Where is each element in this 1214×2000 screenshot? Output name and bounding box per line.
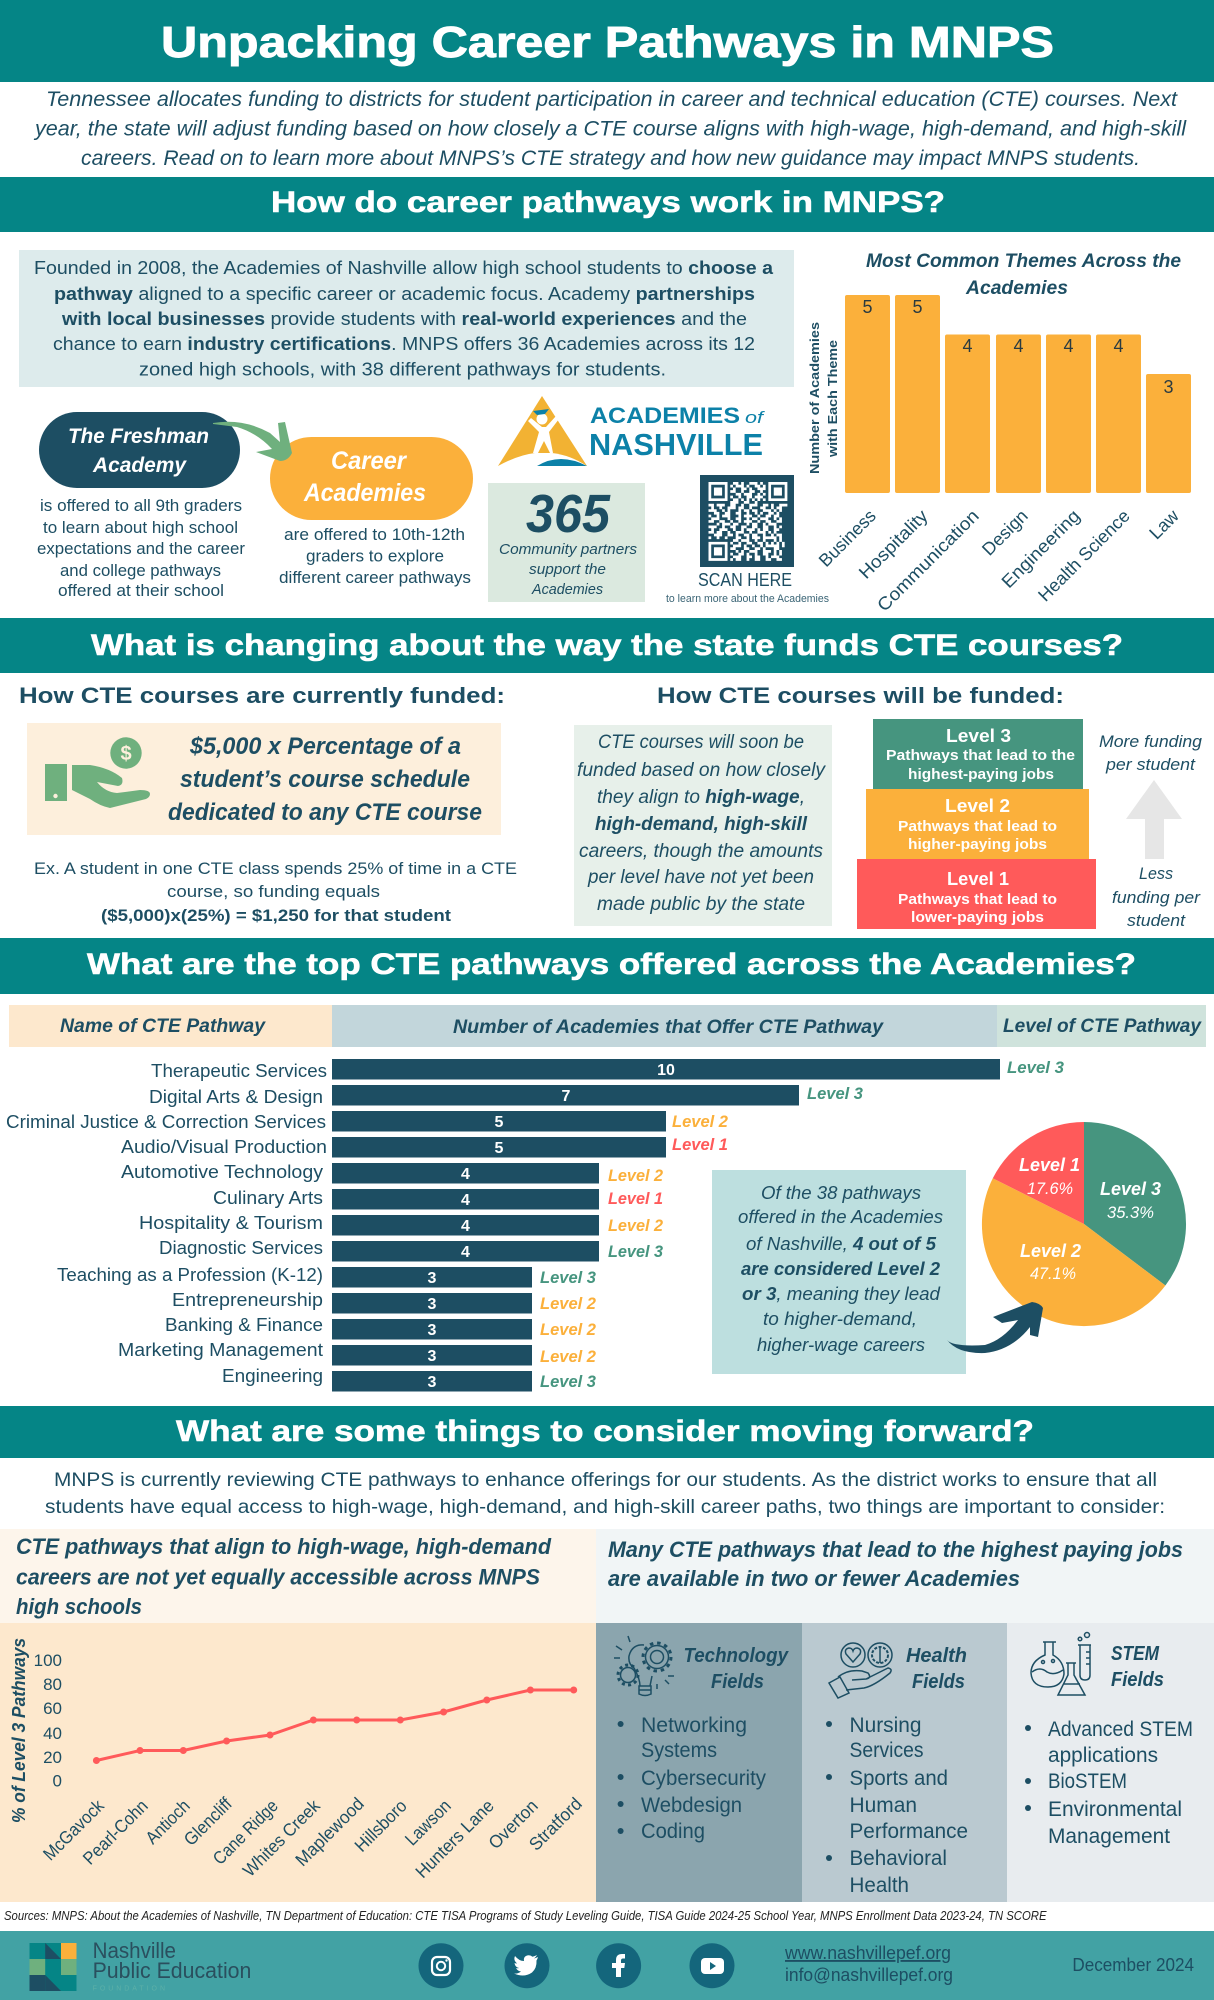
list: health pathways: Nursing	[850, 1714, 922, 1737]
row: Marketing Management	[118, 1340, 596, 1366]
chart: most common themes: 5	[912, 297, 923, 317]
chart: most common themes: Engineering	[998, 506, 1084, 592]
level 3 block: Level 3	[946, 726, 1011, 746]
panel: future funding description: CTE courses will soon be	[598, 732, 804, 753]
logo: Nashville Public Education Foundation: Nashville	[93, 1938, 176, 1963]
panel: academies description: chance to earn industry certifications . MNPS offers 36 Academies across its 12	[53, 333, 755, 354]
level pyramid	[857, 719, 1096, 929]
icon: hand holding money: $	[120, 743, 132, 765]
pie chart: pathway levels	[982, 1122, 1186, 1326]
icon: youtube	[690, 1943, 734, 1988]
list: technology pathways: Cybersecurity	[641, 1767, 766, 1790]
list: technology pathways	[618, 1714, 766, 1843]
QR code with scan label: to learn more about the Academies	[666, 593, 829, 605]
row: Hospitality and Tourism	[139, 1213, 663, 1236]
level 3 block: highest-paying jobs	[908, 767, 1054, 783]
list: technology pathways: Webdesign	[641, 1794, 742, 1817]
line chart: percent of level 3 pathways: Pearl-Cohn	[79, 1796, 152, 1869]
row: Banking and Finance: Level 2	[540, 1321, 596, 1339]
row: Entrepreneurship: Entrepreneurship	[172, 1290, 323, 1310]
row: Teaching as a Profession	[57, 1265, 596, 1288]
row: Criminal Justice: Level 2	[672, 1113, 728, 1131]
list: health pathways: Behavioral	[850, 1847, 947, 1870]
chart: most common themes: Communication	[873, 506, 983, 615]
list: STEM pathways: Environmental	[1048, 1798, 1182, 1821]
row: Digital Arts and Design	[149, 1085, 863, 1107]
row: Entrepreneurship	[172, 1290, 596, 1314]
level 3 block	[873, 719, 1083, 789]
callout: 4 out of 5 pathways	[712, 1170, 966, 1374]
icon: hand holding money	[45, 737, 150, 808]
row: Engineering: Level 3	[540, 1373, 596, 1391]
list: STEM pathways: Advanced STEM	[1048, 1718, 1193, 1741]
row: Audio Visual Production: Level 1	[672, 1136, 728, 1154]
list: health pathways: Performance	[850, 1820, 968, 1843]
row: Hospitality and Tourism: 4	[461, 1218, 470, 1235]
chart: most common themes: Hospitality	[855, 506, 932, 583]
panel: academies description: Founded in 2008, the Academies of Nashville allow high school students to choose a	[34, 257, 774, 278]
pie chart: pathway levels: 17.6%	[1027, 1180, 1073, 1198]
panel: current funding formula: dedicated to any CTE course	[168, 799, 482, 826]
panel: academies description: pathway aligned to a specific career or academic focus. Academy partnerships	[54, 283, 755, 304]
bar chart: pathways by academies	[6, 1059, 1064, 1392]
panel: academies description	[19, 250, 794, 387]
table header row	[9, 1005, 1206, 1047]
level 2 block: Pathways that lead to	[898, 819, 1057, 835]
chart: most common themes: with Each Theme	[826, 340, 840, 458]
panel: future funding description	[574, 725, 832, 926]
panel: technology fields	[596, 1623, 802, 1902]
row: Marketing Management: 3	[428, 1348, 437, 1365]
chart: most common themes: 4	[1063, 336, 1074, 356]
panel: current funding formula: $5,000 x Percentage of a	[189, 733, 461, 760]
callout: 4 out of 5 pathways: of Nashville, 4 out of 5	[746, 1234, 937, 1254]
row: Engineering: Engineering	[222, 1366, 323, 1386]
row: Banking and Finance: 3	[428, 1322, 437, 1339]
level 1 block: Level 1	[947, 869, 1009, 889]
list: STEM pathways: BioSTEM	[1048, 1770, 1127, 1793]
chart: most common themes: Number of Academies	[808, 322, 822, 474]
pie chart: pathway levels: Level 3	[1100, 1179, 1161, 1199]
chart: most common themes: 5	[862, 297, 873, 317]
chart: most common themes: Academies	[965, 277, 1068, 299]
text: funding example: ($5,000)x(25%) = $1,250 for that student	[101, 906, 451, 925]
table header row: Number of Academies that Offer CTE Pathway	[453, 1017, 884, 1038]
chart: most common themes: 4	[962, 336, 973, 356]
panel: future funding description: careers, though the amounts	[579, 841, 823, 862]
arrow: freshman to career	[213, 422, 292, 461]
panel: freshman academy: offered at their school	[58, 582, 224, 600]
line chart: percent of level 3 pathways: McGavock	[39, 1795, 108, 1864]
row: Audio Visual Production	[121, 1136, 728, 1158]
panel: fields heading	[596, 1529, 1214, 1623]
row: Criminal Justice	[6, 1111, 728, 1132]
logo: Nashville Public Education Foundation	[30, 1938, 251, 1992]
panel: future funding description: high-demand, high-skill	[595, 814, 808, 835]
row: Culinary Arts: Level 1	[608, 1190, 663, 1208]
panel: freshman academy: and college pathways	[60, 562, 221, 580]
panel: career academies: Academies	[303, 479, 426, 507]
line chart: percent of level 3 pathways: Overton	[485, 1796, 542, 1853]
line chart: percent of level 3 pathways: 80	[43, 1675, 62, 1694]
level 2 block: Level 2	[945, 796, 1010, 816]
section heading: top pathways: What are the top CTE pathways offered across the Academies?	[87, 948, 1136, 981]
row: Culinary Arts: 4	[461, 1192, 470, 1209]
panel: current funding formula	[27, 723, 501, 835]
chart: most common themes: Design	[978, 506, 1032, 559]
section heading: funding change	[0, 618, 1214, 673]
list: technology pathways: Systems	[641, 1739, 717, 1762]
footer	[0, 1931, 1214, 2000]
panel: 365 community partners: 365	[526, 484, 611, 544]
panel: career academies: graders to explore	[306, 548, 444, 566]
panel: fields heading: are available in two or fewer Academies	[608, 1566, 1020, 1591]
icon: hand with heart and brain	[829, 1643, 892, 1698]
chart: most common themes: Business	[815, 506, 880, 571]
panel: 365 community partners: Academies	[531, 581, 603, 598]
line chart: percent of level 3 pathways: % of Level 3 Pathways	[9, 1638, 29, 1823]
list: technology pathways: Coding	[641, 1820, 705, 1843]
pie chart: pathway levels: 35.3%	[1107, 1204, 1154, 1222]
panel: freshman academy: Academy	[92, 453, 187, 477]
panel: access heading: CTE pathways that align to high-wage, high-demand	[16, 1534, 552, 1559]
row: Therapeutic Services: Level 3	[1007, 1059, 1064, 1077]
text: funding example: course, so funding equals	[167, 882, 380, 901]
panel: 365 community partners	[488, 483, 645, 602]
row: Engineering	[222, 1366, 596, 1392]
title banner	[0, 0, 1214, 82]
callout: 4 out of 5 pathways: offered in the Academies	[738, 1207, 943, 1227]
funding direction arrow and labels: Less	[1139, 864, 1173, 883]
contact links: info@nashvillepef.org	[785, 1964, 953, 1985]
line chart: percent of level 3 pathways: 0	[53, 1772, 62, 1790]
panel: academies description: with local businesses provide students with real-world experiences and the	[61, 308, 747, 329]
callout: 4 out of 5 pathways: are considered Level 2	[741, 1259, 940, 1279]
row: Automotive Technology: Level 2	[608, 1167, 663, 1185]
row: Digital Arts and Design: Digital Arts & Design	[149, 1087, 323, 1107]
panel: freshman academy: The Freshman	[68, 424, 209, 448]
section heading: moving forward: What are some things to consider moving forward?	[176, 1415, 1034, 1448]
panel: career academies: Career	[331, 447, 407, 475]
icon: lightbulb with gears	[614, 1636, 674, 1696]
line chart: percent of level 3 pathways: 20	[43, 1748, 62, 1767]
panel: access heading: high schools	[16, 1594, 142, 1619]
logo: Academies of Nashville: of	[745, 408, 766, 427]
panel: technology fields: Technology	[684, 1645, 789, 1667]
panel: freshman academy	[37, 412, 246, 600]
panel: STEM fields	[1007, 1623, 1214, 1902]
list: health pathways	[826, 1714, 968, 1897]
level 2 block: higher-paying jobs	[908, 837, 1047, 853]
text: funding example	[34, 859, 517, 925]
icon: facebook	[596, 1943, 641, 1988]
table header row: Level of CTE Pathway	[1003, 1016, 1202, 1037]
table header row: Name of CTE Pathway	[60, 1016, 266, 1037]
funding direction arrow and labels: student	[1127, 911, 1186, 930]
panel: future funding description: they align to high-wage,	[597, 787, 805, 808]
panel: health fields	[802, 1623, 1007, 1902]
panel: health fields: Health	[906, 1645, 967, 1667]
section heading: how pathways work	[0, 177, 1214, 232]
chart: most common themes: Health Science	[1034, 506, 1134, 605]
row: Marketing Management: Level 2	[540, 1348, 596, 1366]
panel: future funding description: made public by the state	[597, 894, 805, 915]
line chart: percent of level 3 pathways: Cane Ridge	[209, 1796, 282, 1869]
panel: future funding description: per level have not yet been	[587, 867, 814, 888]
logo: Nashville Public Education Foundation: FOUNDATION	[93, 1986, 165, 1992]
logo: Academies of Nashville	[498, 396, 766, 468]
contact links: www.nashvillepef.org	[784, 1942, 951, 1963]
row: Hospitality and Tourism: Hospitality & Tourism	[139, 1213, 323, 1233]
level 1 block: Pathways that lead to	[898, 892, 1057, 908]
line chart: percent of level 3 pathways: 40	[43, 1724, 62, 1743]
list: STEM pathways: Management	[1048, 1825, 1170, 1848]
intro text: considerations: students have equal access to high-wage, high-demand, and high-skill career paths, two things are important to consider:	[45, 1496, 1165, 1518]
panel: 365 community partners: support the	[529, 561, 606, 578]
intro paragraph: careers. Read on to learn more about MNPS’s CTE strategy and how new guidance may impact MNPS students.	[81, 147, 1140, 170]
row: Digital Arts and Design: 7	[562, 1088, 571, 1105]
pie chart: pathway levels: Level 1	[1019, 1155, 1080, 1175]
row: Therapeutic Services	[151, 1059, 1064, 1081]
panel: access heading	[0, 1529, 596, 1623]
row: Audio Visual Production: 5	[495, 1140, 504, 1157]
list: STEM pathways	[1025, 1718, 1193, 1848]
chart: most common themes: 4	[1113, 336, 1124, 356]
panel: future funding description: funded based on how closely	[577, 760, 827, 781]
row: Audio Visual Production: Audio/Visual Production	[121, 1137, 327, 1157]
list: health pathways: Health	[850, 1874, 909, 1897]
panel: career academies	[270, 437, 473, 587]
panel: health fields: Fields	[912, 1671, 965, 1693]
panel: technology fields: Fields	[711, 1671, 764, 1693]
callout: 4 out of 5 pathways: Of the 38 pathways	[761, 1183, 921, 1203]
line chart: percent of level 3 pathways: Lawson	[401, 1796, 455, 1849]
row: Therapeutic Services: 10	[657, 1062, 675, 1079]
level 1 block	[857, 859, 1096, 929]
row: Engineering: 3	[428, 1374, 437, 1391]
level 2 block	[866, 789, 1089, 859]
chart: most common themes: Most Common Themes Across the	[866, 250, 1181, 272]
row: Culinary Arts: Culinary Arts	[213, 1188, 323, 1208]
intro text: considerations	[45, 1469, 1165, 1518]
panel: STEM fields: STEM	[1111, 1643, 1160, 1665]
row: Teaching as a Profession: 3	[428, 1270, 437, 1287]
row: Banking and Finance	[165, 1315, 596, 1340]
list: health pathways: Human	[850, 1794, 917, 1817]
funding direction arrow and labels: funding per	[1112, 888, 1201, 907]
sources line: Sources: MNPS: About the Academies of Nashville, TN Department of Education: CTE TISA Programs of Study Leveling Guide, TISA Guide 2024-25 School Year, MNPS Enrollment Data 2023-24, TN SCORE	[4, 1909, 1047, 1923]
arrow: callout to pie	[947, 1302, 1043, 1353]
pie chart: pathway levels: Level 2	[1020, 1241, 1081, 1261]
row: Teaching as a Profession: Teaching as a Profession (K-12)	[57, 1265, 323, 1285]
logo: Academies of Nashville: NASHVILLE	[589, 427, 763, 462]
row: Criminal Justice: Criminal Justice & Correction Services	[6, 1112, 326, 1132]
row: Hospitality and Tourism: Level 2	[608, 1217, 663, 1235]
panel: access heading: careers are not yet equally accessible across MNPS	[16, 1564, 540, 1590]
section heading: moving forward	[0, 1406, 1214, 1458]
icon: lab flasks	[1031, 1632, 1091, 1695]
funding direction arrow and labels	[1099, 732, 1203, 930]
list: health pathways: Services	[850, 1739, 924, 1762]
line chart: percent of level 3 pathways: 100	[34, 1651, 62, 1670]
level 1 block: lower-paying jobs	[911, 910, 1044, 926]
line chart: percent of level 3 pathways: Hillsboro	[351, 1796, 411, 1856]
chart: most common themes: 3	[1163, 377, 1174, 397]
logo: Academies of Nashville: ACADEMIES	[590, 403, 740, 428]
intro text: considerations: MNPS is currently reviewing CTE pathways to enhance offerings for our students. As the district works to ensure that all	[54, 1469, 1157, 1491]
list: health pathways: Sports and	[850, 1767, 948, 1790]
chart: most common themes	[808, 250, 1191, 615]
title banner: Unpacking Career Pathways in MNPS	[161, 19, 1054, 67]
panel: freshman academy: to learn about high school	[43, 519, 238, 537]
panel: academies description: zoned high schools, with 38 different pathways for students.	[139, 358, 666, 380]
icon: twitter	[504, 1943, 550, 1988]
callout: 4 out of 5 pathways: to higher-demand,	[763, 1309, 917, 1329]
callout: 4 out of 5 pathways: or 3, meaning they lead	[742, 1284, 941, 1304]
panel: career academies: different career pathways	[279, 569, 471, 587]
section heading: how pathways work: How do career pathways work in MNPS?	[271, 186, 945, 219]
panel: STEM fields: Fields	[1111, 1669, 1164, 1691]
date: December 2024	[1072, 1955, 1194, 1975]
row: Marketing Management: Marketing Management	[118, 1340, 323, 1360]
row: Diagnostic Services: Level 3	[608, 1243, 663, 1261]
line chart: percent of level 3 pathways: Hunters Lane	[412, 1796, 498, 1882]
funding direction arrow and labels: per student	[1105, 755, 1196, 774]
chart: most common themes: 4	[1013, 336, 1024, 356]
list: STEM pathways: applications	[1048, 1744, 1158, 1767]
row: Teaching as a Profession: Level 3	[540, 1269, 596, 1287]
line chart: percent of level 3 pathways	[0, 1623, 596, 1902]
row: Culinary Arts	[213, 1188, 663, 1210]
logo: Nashville Public Education Foundation: Public Education	[93, 1958, 251, 1983]
funding direction arrow and labels: More funding	[1099, 732, 1203, 751]
list: technology pathways: Networking	[641, 1714, 747, 1737]
panel: 365 community partners: Community partners	[499, 541, 638, 558]
panel: fields heading: Many CTE pathways that lead to the highest paying jobs	[608, 1537, 1183, 1562]
intro paragraph: year, the state will adjust funding based on how closely a CTE course aligns with high-wage, high-demand, and high-skill	[33, 118, 1187, 140]
heading: currently funded: How CTE courses are currently funded:	[19, 683, 505, 708]
line chart: percent of level 3 pathways: Antioch	[142, 1796, 194, 1848]
row: Diagnostic Services: Diagnostic Services	[159, 1238, 323, 1258]
panel: current funding formula: student’s course schedule	[180, 766, 470, 793]
line chart: percent of level 3 pathways: Stratford	[525, 1794, 586, 1854]
icon: instagram	[418, 1943, 464, 1988]
line chart: percent of level 3 pathways: 60	[43, 1699, 62, 1718]
callout: 4 out of 5 pathways: higher-wage careers	[757, 1335, 925, 1355]
heading: will be funded: How CTE courses will be funded:	[657, 683, 1064, 708]
intro paragraph: Tennessee allocates funding to districts for student participation in career and technical education (CTE) courses. Next	[46, 88, 1178, 111]
line chart: percent of level 3 pathways: Whites Creek	[239, 1795, 324, 1881]
panel: freshman academy: expectations and the career	[37, 540, 246, 558]
row: Entrepreneurship: 3	[428, 1296, 437, 1313]
section heading: funding change: What is changing about the way the state funds CTE courses?	[91, 629, 1123, 662]
contact links	[784, 1942, 953, 1985]
line chart: percent of level 3 pathways: Glencliff	[180, 1793, 236, 1850]
row: Entrepreneurship: Level 2	[540, 1295, 596, 1313]
row: Criminal Justice: 5	[495, 1114, 504, 1131]
chart: most common themes: Law	[1145, 505, 1184, 543]
QR code with scan label: SCAN HERE	[698, 570, 792, 590]
row: Digital Arts and Design: Level 3	[807, 1085, 863, 1103]
row: Therapeutic Services: Therapeutic Services	[151, 1061, 327, 1081]
intro paragraph	[33, 88, 1187, 170]
row: Diagnostic Services	[159, 1238, 663, 1262]
QR code with scan label	[666, 475, 829, 605]
row: Banking and Finance: Banking & Finance	[165, 1315, 323, 1335]
row: Automotive Technology	[121, 1162, 663, 1185]
text: funding example: Ex. A student in one CTE class spends 25% of time in a CTE	[34, 859, 517, 878]
level 3 block: Pathways that lead to the	[886, 748, 1075, 764]
row: Automotive Technology: 4	[461, 1166, 470, 1183]
pie chart: pathway levels: 47.1%	[1030, 1265, 1076, 1283]
row: Automotive Technology: Automotive Technology	[121, 1162, 323, 1182]
line chart: percent of level 3 pathways: Maplewood	[291, 1794, 368, 1870]
panel: freshman academy: is offered to all 9th graders	[40, 497, 242, 515]
panel: career academies: are offered to 10th-12th	[284, 526, 465, 544]
section heading: top pathways	[0, 938, 1214, 994]
row: Diagnostic Services: 4	[461, 1244, 470, 1261]
